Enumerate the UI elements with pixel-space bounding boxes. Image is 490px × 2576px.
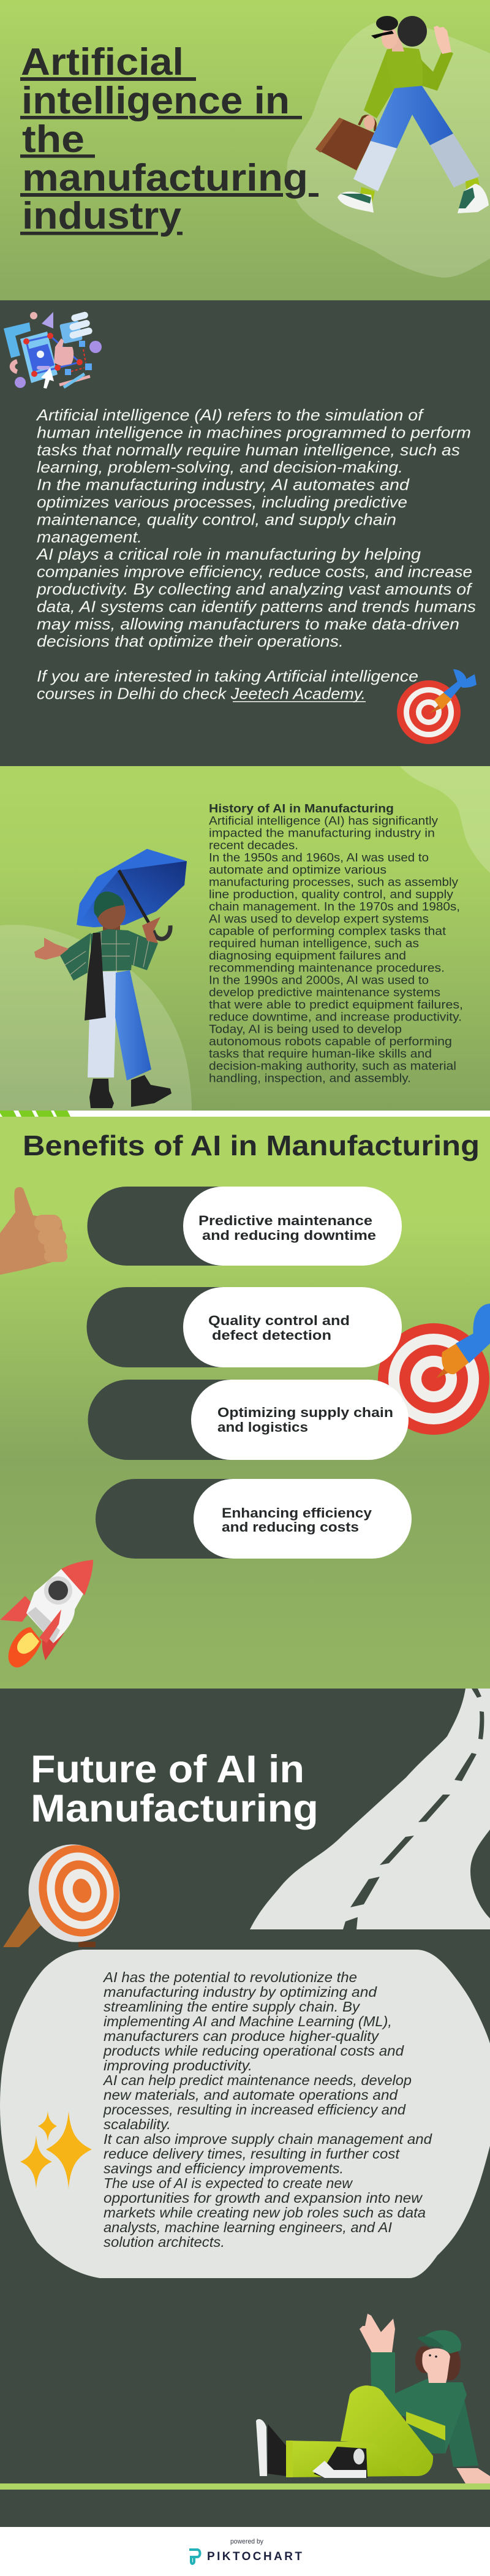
text block: AI definition (36, 406, 476, 702)
title: Artificial (21, 41, 184, 83)
icon: target with dart (397, 669, 477, 744)
title (20, 41, 318, 237)
text block: future of AI: savings and efficiency improvements. (104, 2160, 344, 2176)
heading: Benefits of AI in Manufacturing (23, 1130, 480, 1161)
text block: history of AI: recommending maintenance procedures. (209, 961, 445, 975)
text block: future of AI: analysts, machine learning engineers, and AI (104, 2219, 393, 2235)
text block: future of AI: The use of AI is expected to create new (104, 2175, 353, 2191)
icon: Piktochart logo (189, 2550, 200, 2564)
text block: AI definition: may miss, allowing manufacturers to make data-driven (37, 615, 459, 633)
text block: future of AI: processes, resulting in increased efficiency and (103, 2102, 406, 2118)
text block: future of AI: scalability. (104, 2116, 171, 2132)
title: manufacturing (22, 157, 308, 199)
text block: history of AI: required human intelligence, such as (209, 937, 419, 950)
item: predictive maintenance: and reducing downtime (202, 1228, 376, 1243)
text block: future of AI: reduce delivery times, resulting in further cost (104, 2146, 401, 2162)
text block: history of AI: handling, inspection, and assembly. (209, 1071, 411, 1085)
title: industry (22, 195, 182, 237)
text block: AI definition: companies improve efficiency, reduce costs, and increase (37, 563, 472, 581)
text block: history of AI: autonomous robots capable of performing (209, 1035, 452, 1048)
bottom-left blob (0, 925, 192, 1111)
text block: future of AI: markets while creating new job roles such as data (104, 2205, 426, 2221)
icon: large target with dart (378, 1304, 490, 1435)
text block: AI definition: courses in Delhi do check Jeetech Academy. (37, 684, 366, 702)
illustration: man with umbrella (34, 849, 187, 1108)
item: supply chain: and logistics (217, 1419, 308, 1435)
text block: AI definition: learning, problem-solving, and decision-making. (37, 458, 403, 476)
text block: history of AI: In the 1950s and 1960s, AI was used to (209, 851, 429, 864)
panel: introduction (0, 300, 490, 766)
text block: future of AI: solution architects. (104, 2234, 225, 2250)
icon: design tools collage (4, 311, 102, 389)
text block: future of AI: It can also improve supply chain management and (104, 2131, 432, 2147)
item: predictive maintenance: Predictive maintenance (198, 1213, 372, 1228)
text block: future of AI: AI can help predict maintenance needs, develop (102, 2072, 412, 2088)
text block: future of AI: implementing AI and Machine Learning (ML), (104, 2013, 392, 2029)
heading: Manufacturing (31, 1787, 318, 1830)
illustration: sitting person waving (256, 2314, 490, 2483)
text block: history of AI: diagnosing equipment failures and (209, 949, 406, 962)
title: the (22, 118, 85, 161)
header background blob (287, 21, 490, 278)
text block: AI definition: productivity. By collecting and analyzing vast amounts of (36, 580, 473, 598)
text block: history of AI: line production, quality control, and supply (209, 887, 453, 901)
text block: future of AI: streamlining the entire supply chain. By (104, 1999, 361, 2015)
text block: AI definition: tasks that normally require human intelligence, such as (37, 441, 460, 459)
text panel: outlook (0, 1950, 490, 2278)
text block: history of AI: automate and optimize various (209, 863, 386, 876)
text block: future of AI: new materials, and automate operations and (104, 2087, 398, 2103)
illustration: road (250, 1689, 490, 1929)
panel: benefits (0, 1117, 490, 1689)
text block: AI definition: In the manufacturing industry, AI automates and (37, 476, 410, 494)
text block: AI definition: management. (37, 528, 142, 546)
title: intelligence in (21, 80, 290, 122)
item: efficiency: Enhancing efficiency (222, 1505, 372, 1521)
heading (31, 1748, 318, 1830)
panel: future of AI (0, 1689, 490, 2527)
footer: powered by Piktochart (0, 2527, 490, 2576)
item: quality control: defect detection (212, 1328, 331, 1343)
footer: powered by Piktochart: powered by (230, 2538, 263, 2545)
text block: history of AI: capable of performing complex tasks that (209, 924, 447, 938)
text block: history of AI: Today, AI is being used to develop (209, 1022, 402, 1036)
text block: history of AI: reduce downtime, and increase productivity. (209, 1010, 462, 1024)
text block: history of AI: recent decades. (209, 838, 298, 852)
text block: history of AI: develop predictive maintenance systems (209, 986, 440, 999)
top-right blob (400, 766, 490, 873)
item: predictive maintenance (87, 1187, 402, 1266)
text block: AI definition: AI plays a critical role in manufacturing by helping (36, 545, 421, 563)
panel: title header (0, 0, 490, 300)
divider: lime ground line (0, 2483, 490, 2490)
icon: target on wooden stand (3, 1834, 130, 1952)
text block: future of AI (102, 1969, 432, 2250)
text block: AI definition: decisions that optimize their operations. (37, 632, 344, 650)
text block: future of AI: AI has the potential to revolutionize the (102, 1969, 357, 1985)
illustration: woman with briefcase (315, 16, 489, 213)
text block: future of AI: improving productivity. (104, 2057, 252, 2073)
text block: history of AI: AI was used to develop expert systems (209, 912, 429, 925)
divider: white strip with green stripes (0, 1111, 490, 1117)
icon: thumbs up (0, 1187, 67, 1275)
heading: Future of AI in (31, 1748, 304, 1791)
text block: AI definition: maintenance, quality control, and supply chain (37, 510, 396, 528)
text block: AI definition: Artificial intelligence (AI) refers to the simulation of (36, 406, 424, 424)
item: supply chain: Optimizing supply chain (217, 1405, 393, 1420)
panel: history of AI (0, 766, 490, 1111)
text block: history of AI: In the 1990s and 2000s, AI was used to (209, 973, 429, 987)
item: quality control (87, 1287, 402, 1367)
text block: future of AI: manufacturers can produce higher-quality (104, 2028, 380, 2044)
item: efficiency: and reducing costs (222, 1519, 359, 1535)
text block: future of AI: opportunities for growth and expansion into new (104, 2190, 423, 2206)
text block: AI definition: human intelligence in machines programmed to perform (37, 423, 471, 441)
text block: AI definition: If you are interested in taking Artificial intelligence (37, 667, 418, 685)
text block: history of AI: tasks that require human-like skills and (209, 1047, 432, 1060)
text block: history of AI: that were able to predict equipment failures, (209, 998, 463, 1011)
text block: history of AI: decision-making authority, such as material (209, 1059, 456, 1073)
text block: AI definition: data, AI systems can identify patterns and trends humans (37, 597, 476, 615)
text block: history of AI: Artificial intelligence (AI) has significantly (209, 814, 438, 827)
item: supply chain (88, 1380, 409, 1460)
text block: AI definition: optimizes various processes, including predictive (37, 493, 407, 511)
icon: sparkles (20, 2111, 92, 2189)
icon: rocket (0, 1560, 93, 1668)
text block: history of AI: History of AI in Manufacturing (209, 802, 394, 815)
item: quality control: Quality control and (208, 1313, 350, 1328)
text block: future of AI: manufacturing industry by optimizing and (104, 1984, 377, 2000)
text block: future of AI: products while reducing operational costs and (103, 2043, 404, 2059)
text block: history of AI (209, 802, 463, 1085)
footer: powered by Piktochart: PIKTOCHART (207, 2550, 302, 2563)
text block: history of AI: impacted the manufacturing industry in (209, 826, 435, 840)
text block: history of AI: manufacturing processes, such as assembly (209, 875, 458, 889)
item: efficiency (96, 1479, 412, 1559)
text block: history of AI: chain management. In the 1970s and 1980s, (209, 900, 460, 913)
